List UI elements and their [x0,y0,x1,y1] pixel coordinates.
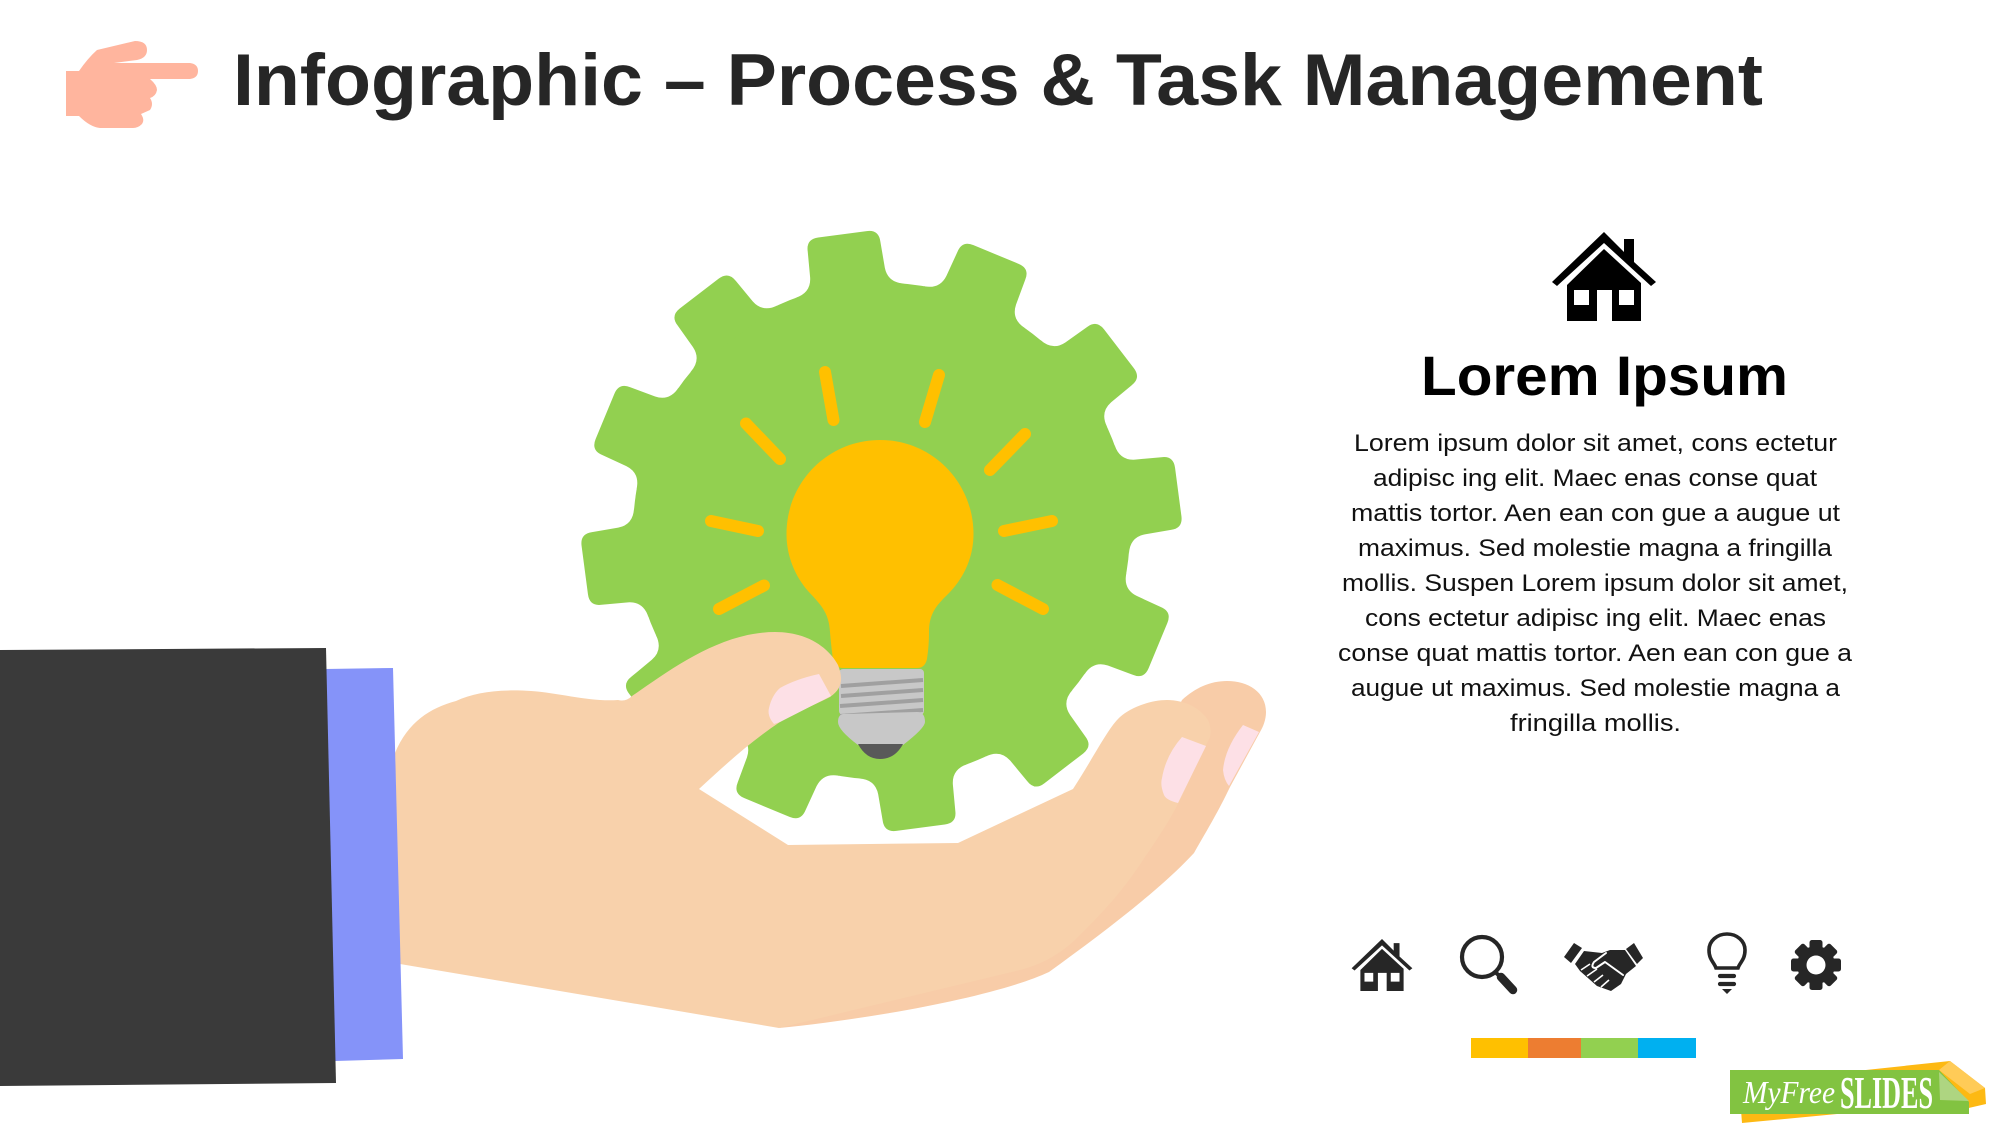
title: Infographic – Process & Task Management [233,40,1763,121]
heading: Lorem Ipsum: Lorem Ipsum [1421,344,1788,407]
hand shadow and back finger [779,681,1266,1028]
body text: augue ut maximus. Sed molestie magna a [1351,675,1841,702]
palm and thumb [395,632,1211,1028]
shirt cuff [325,668,403,1061]
icon: small house [1352,939,1412,991]
bulb screw base [838,669,925,759]
logo: MyFreeSlides: MyFree [1742,1074,1835,1110]
body text: adipisc ing elit. Maec enas conse quat [1373,465,1817,492]
icon: magnifying glass [1462,937,1513,990]
icon: pointing hand [66,41,198,128]
gear [546,195,1217,867]
body text [1338,430,1853,737]
body text: cons ectetur adipisc ing elit. Maec enas [1365,605,1826,632]
body text: mollis. Suspen Lorem ipsum dolor sit amet, [1342,570,1848,597]
front fingernail [1161,737,1206,803]
icon: large house [1552,232,1656,321]
light rays [711,372,1052,609]
back fingernail [1223,725,1259,786]
icon: light bulb [1709,934,1745,994]
body text: fringilla mollis. [1510,710,1681,737]
jacket sleeve [0,648,336,1086]
body text: conse quat mattis tortor. Aen ean con gue a [1338,640,1853,667]
body text: Lorem ipsum dolor sit amet, cons ectetur [1354,430,1837,457]
thumbnail [769,674,831,724]
logo: MyFreeSlides: SLIDES [1840,1067,1933,1118]
icon: gear [1791,940,1841,990]
illustration: open hand [395,632,1266,1028]
body text: maximus. Sed molestie magna a fringilla [1358,535,1833,562]
icon row [1352,934,1841,994]
bulb glass [786,440,974,668]
body text: mattis tortor. Aen ean con gue a augue ut [1351,500,1840,527]
illustration: gear with light bulb [546,195,1217,867]
colour bar [1471,1038,1696,1058]
icon: handshake [1564,943,1643,991]
logo: MyFreeSlides [1730,1061,1986,1123]
